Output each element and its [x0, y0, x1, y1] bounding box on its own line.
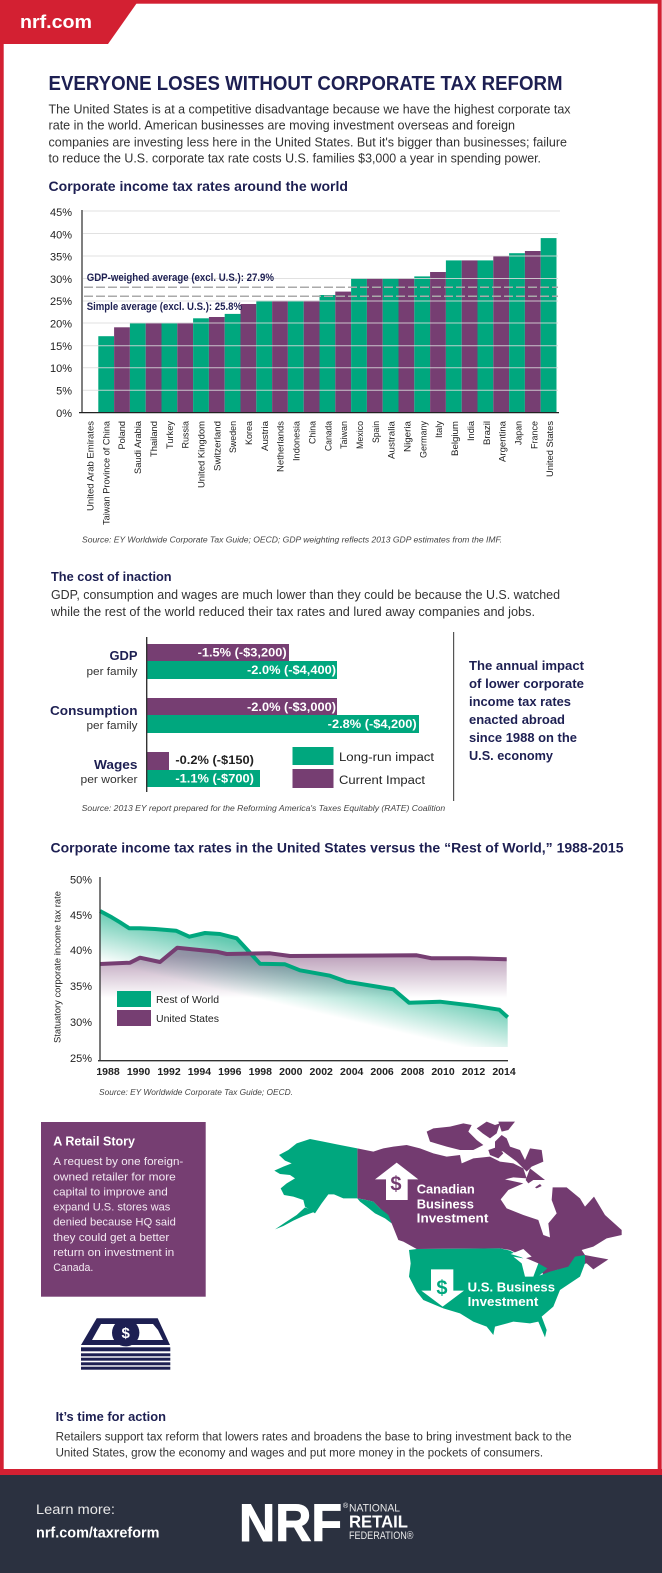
x axis labels: 2010 [431, 1066, 455, 1078]
x axis labels: 1998 [249, 1066, 272, 1078]
callout: annual impact: since 1988 on the [469, 730, 577, 745]
value labels: -1.1% (-$700) [175, 774, 254, 786]
y axis labels: 20% [50, 318, 72, 330]
panel: a retail story: return on investment in [53, 1247, 174, 1259]
y axis labels: 45% [70, 910, 92, 922]
panel: a retail story: denied because HQ said [53, 1217, 176, 1229]
average line labels: GDP-weighed average (excl. U.S.): 27.9% [87, 272, 274, 284]
logo: nrf: NATIONAL [349, 1503, 400, 1515]
y axis labels: 15% [50, 341, 72, 353]
source note: bar chart: Source: EY Worldwide Corporate Tax Guide; OECD; GDP weighting reflects 2013 GDP estimates from the IMF. [82, 534, 502, 544]
country labels: India [466, 420, 477, 441]
legend [117, 991, 219, 1026]
callout: annual impact [469, 658, 585, 763]
panel: a retail story: expand U.S. stores was [53, 1202, 171, 1214]
x axis labels: 2014 [492, 1066, 516, 1078]
country labels [86, 420, 556, 525]
legend: Long-run impact [339, 752, 435, 764]
label: canadian business investment [417, 1181, 489, 1226]
legend: Rest of World [156, 994, 219, 1006]
country labels: Austria [260, 420, 271, 451]
x axis labels: 1990 [127, 1066, 150, 1078]
arrow: u.s. investment down: $ [436, 1277, 448, 1299]
title: EVERYONE LOSES WITHOUT CORPORATE TAX REFORM [48, 73, 562, 95]
legend: Current Impact [339, 775, 426, 787]
category labels: Consumption [50, 703, 138, 718]
logo: nrf [239, 1494, 414, 1553]
x axis labels: 2012 [462, 1066, 485, 1078]
header tab [0, 0, 139, 44]
learn more: Learn more: [36, 1501, 115, 1517]
y axis labels: 10% [50, 363, 72, 375]
label: u.s. business investment [468, 1280, 555, 1309]
callout: annual impact: enacted abroad [469, 712, 565, 727]
logo: nrf: ® [343, 1502, 349, 1510]
country labels: Saudi Arabia [133, 420, 144, 474]
learn more [36, 1501, 160, 1542]
y axis labels: 5% [56, 386, 72, 398]
line chart: US vs rest of world [52, 874, 516, 1078]
intro text: The United States is at a competitive disadvantage because we have the highest corporate tax [48, 102, 571, 116]
panel: a retail story: they could get a better [53, 1232, 170, 1244]
category labels [50, 648, 138, 786]
country labels: Switzerland [212, 421, 223, 471]
y axis labels: 30% [50, 274, 72, 286]
y axis labels: 35% [70, 981, 92, 993]
country labels: Indonesia [292, 420, 303, 461]
country labels: Russia [181, 420, 192, 448]
arrow: u.s. investment down [421, 1269, 464, 1307]
bars [147, 644, 419, 787]
heading: it's time for action: It’s time for action [56, 1409, 166, 1424]
value labels: -0.2% (-$150) [175, 755, 254, 767]
x axis labels: 1988 [96, 1066, 120, 1078]
heading: line chart: Corporate income tax rates in the United States versus the “Rest of World,” 1988-2015 [50, 840, 624, 856]
country labels: United States [545, 421, 556, 477]
country labels: Australia [387, 420, 398, 459]
country labels: Taiwan Province of China [101, 420, 112, 525]
footer [0, 1469, 662, 1573]
x axis labels: 2008 [401, 1066, 424, 1078]
country labels: Japan [513, 421, 524, 445]
y axis labels: 45% [50, 207, 72, 219]
chart: annual impact bars [50, 637, 435, 792]
country labels: France [529, 421, 540, 449]
country labels: Nigeria [402, 420, 414, 452]
country labels: Korea [244, 420, 255, 445]
label: u.s. business investment: U.S. Business [468, 1280, 555, 1295]
logo: nrf: RETAIL [349, 1512, 408, 1532]
logo: nrf: FEDERATION® [349, 1530, 414, 1542]
y axis labels [70, 874, 92, 1065]
icon: stack of money [81, 1318, 170, 1370]
country labels: United Arab Emirates [86, 421, 96, 511]
callout: annual impact: The annual impact [469, 658, 585, 673]
value labels: -2.8% (-$4,200) [328, 719, 417, 731]
great lakes [511, 1249, 532, 1258]
value labels: -2.0% (-$3,000) [247, 702, 336, 714]
value labels: -1.5% (-$3,200) [198, 648, 287, 660]
value labels: -2.0% (-$4,400) [247, 665, 336, 677]
intro text: to reduce the U.S. corporate tax rate costs U.S. families $3,000 a year in spending power. [48, 152, 541, 166]
united states line [100, 948, 507, 964]
average line labels [87, 272, 274, 313]
country labels: Poland [117, 421, 128, 450]
panel: a retail story: A request by one foreign- [53, 1156, 184, 1168]
x axis labels: 2002 [310, 1066, 333, 1078]
panel: a retail story: A Retail Story [53, 1134, 136, 1148]
y axis labels: 40% [70, 945, 92, 957]
x axis labels: 1994 [188, 1066, 211, 1078]
bars [98, 238, 557, 412]
header tab: nrf.com [20, 12, 92, 32]
bar chart: corporate income tax rates [50, 207, 560, 525]
y axis labels: 35% [50, 252, 72, 264]
value labels [175, 648, 417, 786]
country labels: Brazil [482, 421, 493, 445]
text: cost of inaction: GDP, consumption and wages are much lower than they could be because the U.S. watched [51, 588, 560, 602]
country labels: Germany [418, 421, 429, 458]
panel: a retail story [41, 1122, 206, 1297]
icon: stack of money: $ [122, 1325, 131, 1342]
callout: annual impact: U.S. economy [469, 748, 554, 763]
arrow: canadian investment up: $ [390, 1174, 402, 1196]
x axis labels [96, 1066, 516, 1078]
heading: corporate income tax rates around the world: Corporate income tax rates around the world [48, 179, 348, 194]
map: north america [274, 1122, 622, 1337]
average line labels: Simple average (excl. U.S.): 25.8% [87, 301, 242, 313]
country labels: Thailand [149, 421, 160, 457]
label: u.s. business investment: Investment [468, 1294, 539, 1309]
x axis labels: 2004 [340, 1066, 364, 1078]
label: canadian business investment: Business [417, 1196, 474, 1211]
country labels: Netherlands [276, 421, 287, 472]
country labels: Argentina [498, 420, 509, 462]
country labels: Mexico [355, 421, 366, 449]
y axis labels: 0% [56, 408, 72, 420]
y axis labels: 50% [70, 874, 92, 886]
panel: a retail story: capital to improve and [53, 1186, 168, 1198]
source note: impact chart: Source: 2013 EY report prepared for the Reforming America's Taxes Equitably (RATE) Coalition [82, 803, 445, 813]
y axis labels: 40% [50, 229, 72, 241]
legend [292, 747, 435, 788]
x axis labels: 1992 [157, 1066, 181, 1078]
intro text [48, 102, 571, 166]
source note: line chart: Source: EY Worldwide Corporate Tax Guide; OECD. [99, 1087, 293, 1097]
canada [357, 1122, 622, 1275]
text: time for action [56, 1432, 572, 1460]
text: time for action: United States, grow the economy and wages and put more money in the pockets of consumers. [56, 1448, 543, 1460]
panel: a retail story: owned retailer for more [53, 1171, 176, 1183]
arrow: canadian investment up [375, 1163, 418, 1200]
rest of world area [100, 911, 508, 1047]
united states area [100, 948, 507, 998]
country labels: Italy [434, 421, 445, 438]
intro text: companies are investing less here in the United States. But it's bigger than businesses; failure [48, 136, 567, 150]
legend: United States [156, 1013, 219, 1025]
text: cost of inaction [50, 588, 560, 619]
label: canadian business investment: Investment [417, 1211, 489, 1226]
callout: annual impact: of lower corporate [469, 676, 584, 691]
country labels: Sweden [228, 421, 239, 453]
country labels: Taiwan [339, 421, 350, 449]
y axis title: Statuatory corporate income tax rate [52, 891, 64, 1043]
country labels: Turkey [165, 421, 176, 449]
text: time for action: Retailers support tax reform that lowers rates and broadens the base to bring investment back to the [56, 1432, 572, 1444]
country labels: China [307, 420, 318, 444]
label: canadian business investment: Canadian [417, 1181, 475, 1196]
category labels: per family [86, 666, 138, 678]
y axis labels: 25% [70, 1053, 92, 1065]
country labels: Canada [323, 420, 334, 451]
callout: annual impact: income tax rates [469, 694, 571, 709]
y axis labels [50, 207, 72, 420]
category labels: per worker [80, 774, 138, 786]
country labels: United Kingdom [196, 421, 207, 488]
panel: a retail story: Canada. [53, 1262, 93, 1274]
category labels: per family [86, 720, 138, 732]
country labels: Spain [371, 421, 382, 443]
category labels: GDP [110, 648, 138, 663]
heading: the cost of inaction: The cost of inaction [51, 569, 172, 584]
y axis labels: 25% [50, 296, 72, 308]
intro text: rate in the world. American businesses are moving investment overseas and foreign [48, 118, 515, 132]
x axis labels: 2000 [279, 1066, 303, 1078]
rest of world line [100, 911, 508, 1017]
x axis labels: 2006 [370, 1066, 394, 1078]
y axis labels: 30% [70, 1017, 92, 1029]
country labels: Belgium [450, 421, 461, 456]
alaska and united states [274, 1139, 585, 1337]
category labels: Wages [94, 757, 138, 772]
learn more: nrf.com/taxreform [36, 1526, 160, 1542]
x axis labels: 1996 [218, 1066, 242, 1078]
logo: nrf: NRF [239, 1494, 342, 1553]
text: cost of inaction: while the rest of the world reduced their tax rates and lured away companies and jobs. [50, 605, 535, 619]
